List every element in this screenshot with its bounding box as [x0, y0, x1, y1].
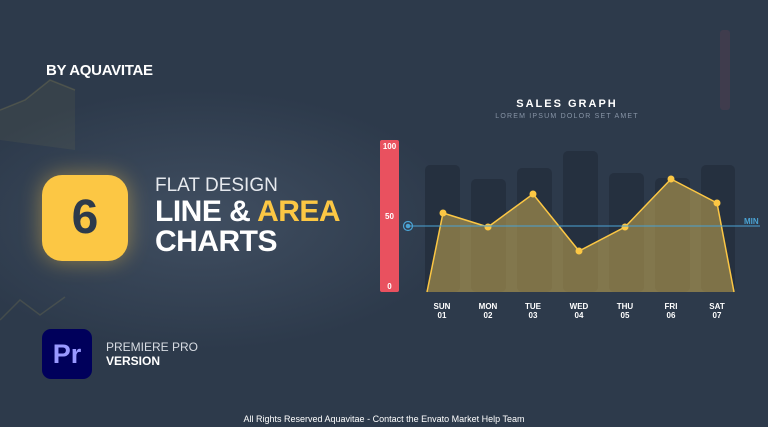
x axis labels: 02 [484, 311, 493, 320]
x axis labels: FRI [665, 302, 677, 311]
background glow [0, 90, 460, 350]
version text: VERSION [106, 354, 160, 368]
x axis labels: TUE [525, 302, 542, 311]
x axis labels: MON [479, 302, 498, 311]
subheading: FLAT DESIGN [155, 175, 278, 196]
x axis labels: 01 [438, 311, 447, 320]
x axis labels: WED [570, 302, 589, 311]
chart title: LOREM IPSUM DOLOR SET AMET [495, 113, 639, 120]
icon: premiere pro: Pr [53, 339, 81, 369]
chart title: SALES GRAPH [516, 98, 618, 110]
y axis bar: 100 [383, 142, 397, 151]
x axis labels: 07 [713, 311, 722, 320]
title: LINE & AREA [155, 195, 340, 228]
x axis labels: 04 [575, 311, 584, 320]
x axis labels: 05 [621, 311, 630, 320]
footer: All Rights Reserved Aquavitae - Contact the Envato Market Help Team [244, 414, 524, 424]
icon: premiere pro [42, 329, 92, 379]
y axis bar: 0 [387, 282, 392, 291]
badge: number 6: 6 [72, 191, 98, 244]
title: CHARTS [155, 225, 277, 258]
heading [155, 175, 340, 258]
x axis labels: SAT [709, 302, 725, 311]
chart title [495, 98, 639, 120]
y axis bar: 50 [385, 212, 394, 221]
min line [404, 217, 760, 230]
x axis labels: THU [617, 302, 633, 311]
area [427, 176, 734, 292]
background bars [425, 151, 735, 292]
y axis bar [380, 140, 399, 292]
badge: number 6 [42, 175, 128, 261]
x axis labels: 03 [529, 311, 538, 320]
title [155, 195, 340, 258]
byline: BY AQUAVITAE [46, 62, 153, 79]
version text [106, 340, 198, 368]
x axis labels: SUN [434, 302, 451, 311]
min line: MIN [744, 217, 759, 226]
version text: PREMIERE PRO [106, 340, 198, 354]
x axis labels: 06 [667, 311, 676, 320]
x axis labels [434, 302, 725, 320]
